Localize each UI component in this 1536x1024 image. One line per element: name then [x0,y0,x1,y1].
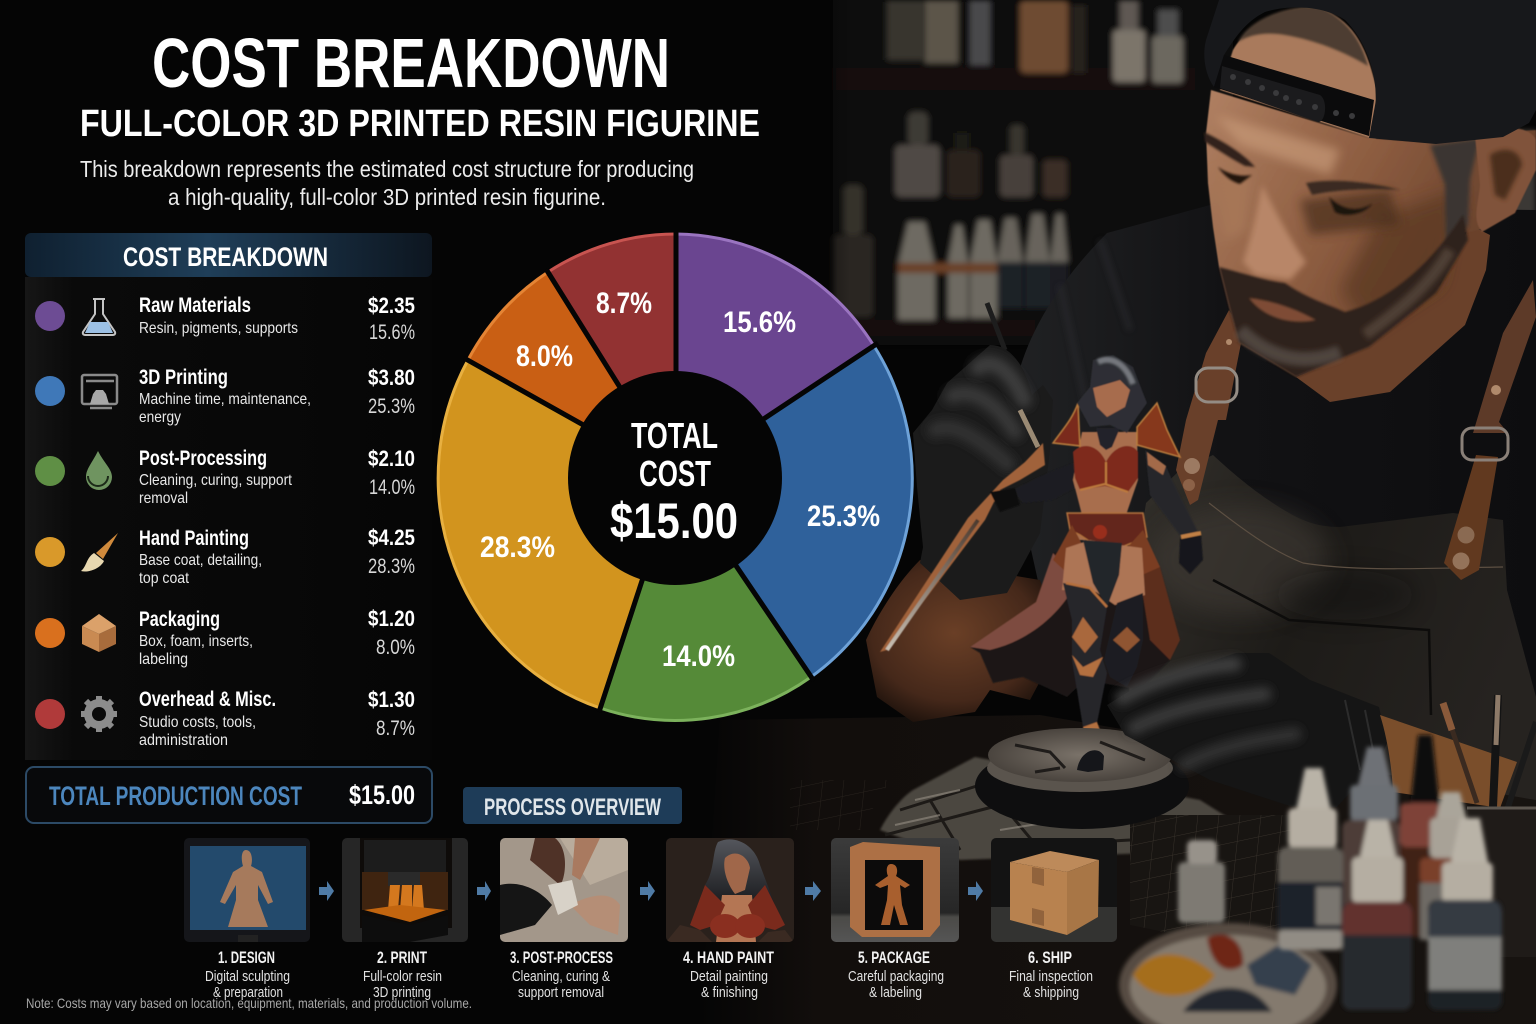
leather straps [1176,280,1536,580]
slice labels: 14.0% [662,640,735,673]
bottle behind: black tip [1410,735,1440,808]
outer skirt [1053,525,1160,575]
process step 3: post-process: Cleaning, curing & [512,968,610,985]
slice: post-processing [600,477,811,720]
slice labels: 28.3% [480,531,555,564]
row: post-processing: Post-Processing [139,447,267,470]
left arm [1012,463,1077,503]
process overview heading: PROCESS OVERVIEW [484,794,661,821]
row: overhead: administration [139,732,228,749]
figure base [975,728,1189,829]
apron [1128,455,1536,830]
process step 1: design: & preparation [213,984,283,1001]
process step 5: package: 5. PACKAGE [858,948,930,967]
row: post-processing: 14.0% [369,476,415,499]
donut centre: TOTAL [631,415,718,456]
row: hand painting: Hand Painting [139,527,249,550]
row: 3d printing: $3.80 [368,365,415,390]
belt [1067,513,1147,553]
arrow 1 [319,881,334,901]
row: overhead: $1.30 [368,687,415,712]
row: packaging: $1.20 [368,606,415,631]
panel heading [25,233,432,277]
process step 4: hand paint [666,838,794,1001]
weapon [880,443,1045,652]
row: hand painting: top coat [139,570,189,587]
row: raw materials: Raw Materials [139,294,251,317]
right leg [1104,593,1143,687]
small bottle [1178,862,1225,923]
arrow 5 [968,881,983,901]
backwards cap [1204,0,1536,144]
process step 3: post-process: 3. POST-PROCESS [510,948,613,967]
row: raw materials [35,293,415,344]
intro text: a high-quality, full-color 3D printed resin figurine. [168,184,606,210]
row: overhead [35,687,415,749]
row: raw materials: $2.35 [368,293,415,318]
slice labels: 8.7% [596,287,652,320]
donut chart [438,230,912,720]
row: hand painting: Base coat, detailing, [139,552,262,569]
front bottle: red [1360,820,1396,858]
paint palette [1119,923,1337,1024]
hair above strap [1238,7,1368,66]
bottle behind: cream cap [1436,792,1467,820]
panel: cost breakdown [25,233,432,760]
slice labels: 15.6% [723,306,796,339]
row: raw materials: 15.6% [369,321,415,344]
row: 3d printing: 25.3% [368,395,415,418]
nose [1243,185,1306,280]
process step 5: package: & labeling [869,984,922,1001]
footnote: Note: Costs may vary based on location, equipment, materials, and production volume. [26,995,472,1011]
process step 6: ship: Final inspection [1009,968,1093,985]
brush jar [1443,695,1536,957]
slice labels [480,287,880,673]
row: post-processing: $2.10 [368,446,415,471]
neck [1296,225,1490,402]
chest armour [1073,446,1138,492]
process step 2: print: Full-color resin [363,968,442,985]
total production cost box: $15.00 [349,780,415,810]
brows and eyes [1204,132,1255,167]
slice: hand painting [438,360,676,708]
row: packaging: labeling [139,651,188,668]
row: packaging: Packaging [139,608,220,631]
process step 2: print: 2. PRINT [377,948,427,967]
title: COST BREAKDOWN [152,24,670,102]
row: packaging [35,606,415,668]
process step 4: hand paint: Detail painting [690,968,768,985]
arrow 2 [477,881,491,901]
large bottle: dark label [1296,768,1331,810]
far background at right [1490,130,1536,230]
torso [1065,432,1143,540]
t-shirt [1018,205,1536,720]
intro text [80,156,694,210]
row: 3d printing: energy [139,409,181,426]
process step 5: package [831,838,959,1001]
bottle behind: grey cap [1358,747,1392,785]
process step 4: hand paint: & finishing [701,984,758,1001]
title [80,24,760,145]
table and cutting mat [700,715,1536,1024]
slice: 3d printing [676,346,912,677]
process step 3: post-process: support removal [518,984,604,1001]
thighs [1062,540,1145,605]
process step 4: hand paint: 4. HAND PAINT [683,948,774,967]
process step 1: design: Digital sculpting [205,968,290,985]
face mask [1206,90,1536,377]
shoulders [1053,403,1080,446]
donut centre: COST [639,453,711,494]
process overview heading [463,787,682,824]
row: post-processing: Cleaning, curing, support [139,472,292,489]
right arm [1145,450,1200,542]
armour plates [1072,617,1098,653]
beard [1219,215,1468,377]
title: FULL-COLOR 3D PRINTED RESIN FIGURINE [80,103,760,145]
row: post-processing: removal [139,490,188,507]
photo: artisan painting a figurine [700,0,1536,1024]
row: overhead: Overhead & Misc. [139,688,276,711]
ear [1475,128,1536,232]
process step 3: post-process [500,838,628,1001]
process step 2: print: 3D printing [373,984,431,1001]
donut centre [568,371,782,585]
background shelves with bottles [833,0,1233,345]
row: packaging: 8.0% [376,636,415,659]
total production cost box: TOTAL PRODUCTION COST [49,781,302,811]
intro text: This breakdown represents the estimated cost structure for producing [80,156,694,182]
panel heading: COST BREAKDOWN [123,242,328,272]
process step 5: package: Careful packaging [848,968,944,985]
face [1093,380,1130,417]
forehead under cap opening [1220,8,1376,140]
row: hand painting: 28.3% [368,555,415,578]
right forearm [1380,715,1517,808]
fade from left [790,0,850,760]
left glove holding brush [913,303,1053,600]
cape [970,540,1180,697]
process step 2: print [342,838,468,1001]
dropper bottles [1178,735,1502,1010]
left boot [1063,583,1107,772]
row: packaging: Box, foam, inserts, [139,633,253,650]
row: hand painting: $4.25 [368,525,415,550]
arrow 3 [640,881,655,901]
slice: packaging [468,272,676,477]
process step 1: design: 1. DESIGN [218,948,275,967]
stone slab [880,757,1240,860]
process step 6: ship: & shipping [1023,984,1079,1001]
slice labels: 25.3% [807,500,880,533]
right glove [1107,653,1387,807]
process step 6: ship [991,838,1117,1001]
row: post-processing [35,446,415,507]
arrow 4 [805,881,821,901]
row: raw materials: Resin, pigments, supports [139,320,298,337]
front bottle: slate [1451,818,1488,862]
hair [1077,355,1147,433]
process step 1: design [184,838,310,1001]
left forearm [866,560,1062,722]
slice: raw materials [676,234,874,477]
lips [1249,298,1316,322]
row: 3d printing: 3D Printing [139,366,228,389]
figurine [880,355,1203,772]
row: overhead: Studio costs, tools, [139,714,256,731]
total production cost box [26,767,432,823]
row: 3d printing: Machine time, maintenance, [139,391,311,408]
head and face [1204,7,1536,377]
donut centre: $15.00 [610,493,738,549]
row: hand painting [35,525,415,587]
row: 3d printing [35,365,415,426]
row: overhead: 8.7% [376,717,415,740]
loincloth [1083,540,1122,607]
process step 6: ship: 6. SHIP [1028,948,1072,967]
slice labels: 8.0% [516,340,573,373]
slice: overhead [548,234,676,477]
temple hair [1430,138,1480,255]
